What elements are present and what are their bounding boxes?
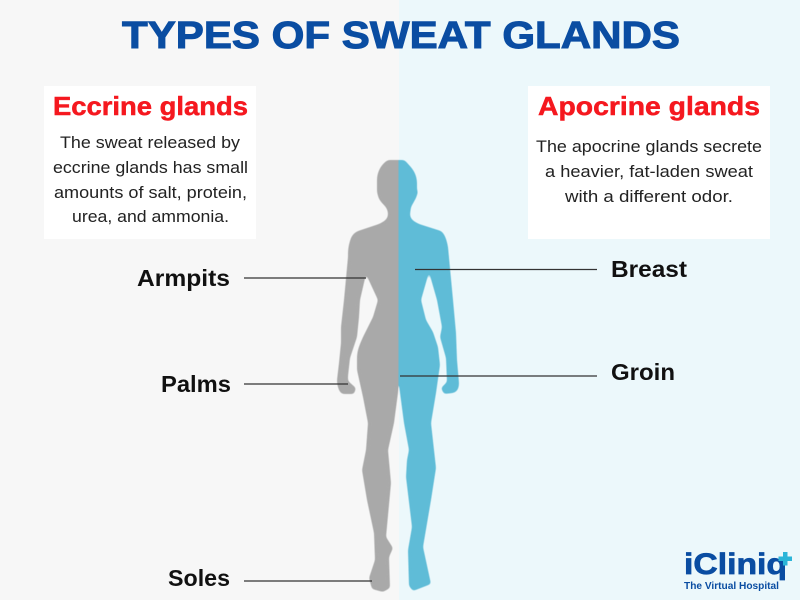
heading: eccrine glands: Eccrine glands: [53, 91, 248, 121]
callout: breast: Breast: [611, 256, 687, 282]
logo: iCliniq: [684, 548, 792, 592]
text block: eccrine description: The sweat released by: [60, 133, 241, 152]
text block: eccrine description: amounts of salt, protein,: [54, 183, 247, 202]
logo tagline: The Virtual Hospital: [684, 581, 779, 592]
callout: armpits: Armpits: [137, 265, 230, 291]
text block: eccrine description: [53, 133, 248, 226]
logo: iCliniq: iCliniq: [684, 548, 787, 581]
panel: apocrine glands: [528, 86, 770, 239]
text block: apocrine description: The apocrine glands secrete: [536, 137, 762, 156]
title: TYPES OF SWEAT GLANDS: [122, 15, 680, 57]
callout: soles: Soles: [168, 565, 230, 591]
panel: eccrine glands: [44, 86, 256, 239]
callout: palms: Palms: [161, 371, 231, 397]
left half of body: eccrine: [337, 160, 404, 592]
right half of body: apocrine: [393, 160, 459, 591]
callout: groin: Groin: [611, 359, 675, 385]
text block: eccrine description: eccrine glands has small: [53, 158, 248, 177]
body silhouette: [337, 160, 459, 592]
text block: eccrine description: urea, and ammonia.: [72, 207, 229, 226]
heading: apocrine glands: Apocrine glands: [538, 91, 760, 121]
text block: apocrine description: [536, 137, 762, 206]
text block: apocrine description: with a different odor.: [564, 187, 733, 206]
icon: plus: [778, 552, 792, 566]
text block: apocrine description: a heavier, fat-laden sweat: [545, 162, 753, 181]
